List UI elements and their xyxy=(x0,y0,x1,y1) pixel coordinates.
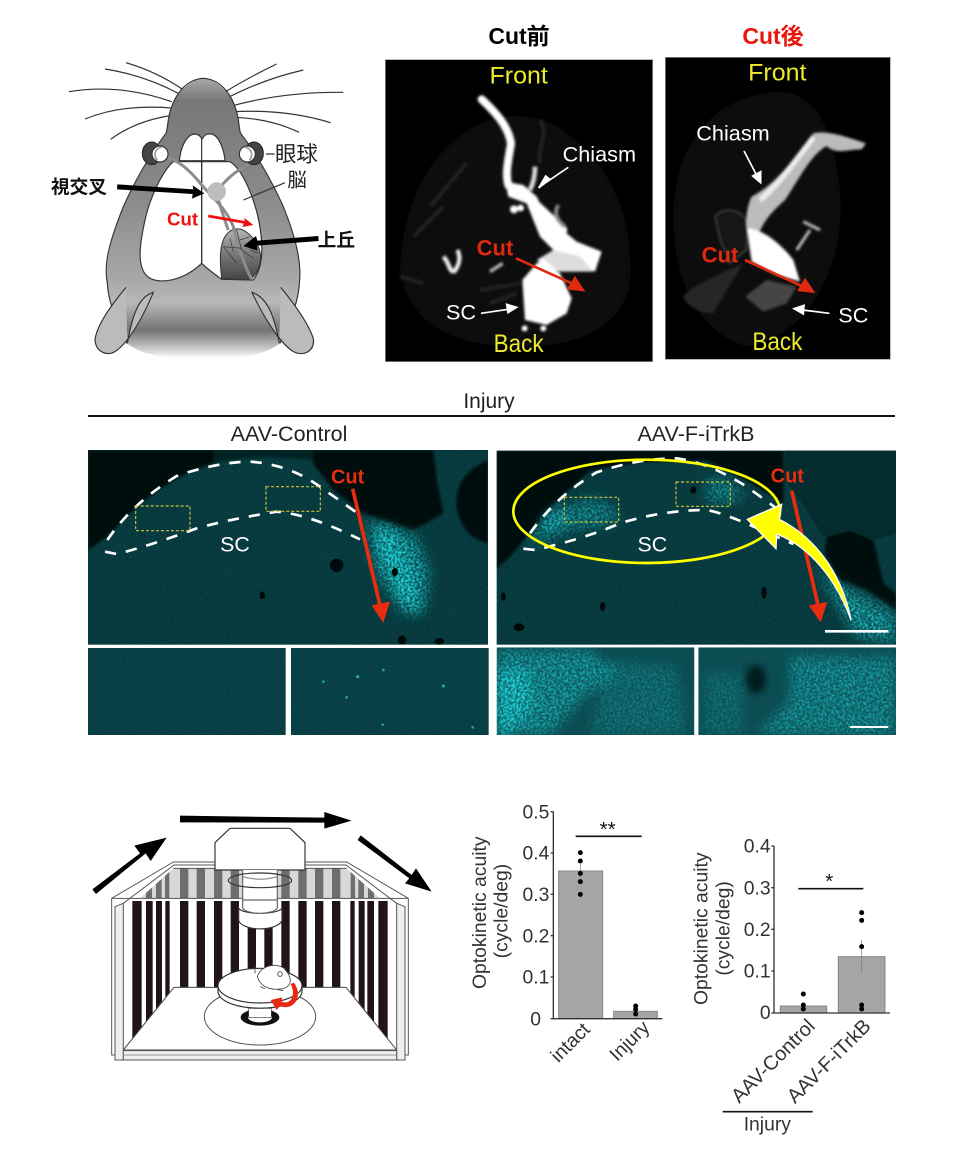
inset right xyxy=(698,647,896,735)
group bar xyxy=(723,1109,813,1114)
divider line xyxy=(88,415,895,417)
label: Cut: Cut xyxy=(477,235,514,260)
arrow: yellow curved xyxy=(747,504,851,620)
data points xyxy=(578,850,638,1016)
y axis tick labels: 0.4 xyxy=(522,844,550,865)
error bar xyxy=(861,940,863,973)
y axis tick labels: 0 xyxy=(530,1009,541,1030)
photo: brain before cut xyxy=(385,60,653,362)
label: optic chiasm: 視交叉 xyxy=(51,176,107,197)
icon: superior colliculus xyxy=(220,229,261,280)
inset right xyxy=(291,648,489,735)
heading: AAV-Control: AAV-Control xyxy=(231,422,347,446)
axes xyxy=(551,812,662,1019)
rotating platform xyxy=(218,968,302,1008)
arrow: SC xyxy=(481,304,517,313)
photo background xyxy=(665,57,890,359)
chart: optokinetic acuity intact vs injury xyxy=(470,802,662,1067)
arrow: Cut xyxy=(353,489,387,619)
micrograph background xyxy=(88,450,488,645)
back wall black stripes xyxy=(123,900,397,1050)
x label: AAV-Control: AAV-Control xyxy=(727,1015,820,1108)
label: Back: Back xyxy=(752,328,803,356)
faint head shape xyxy=(400,116,630,347)
icon: optic chiasm xyxy=(207,182,226,201)
arrow: Cut xyxy=(745,260,813,291)
camera body xyxy=(215,828,305,870)
heading: AAV-F-iTrkB: AAV-F-iTrkB xyxy=(637,422,755,446)
back wall upper stripes xyxy=(140,868,380,898)
arrow: rotation left xyxy=(92,838,167,894)
title: Cut after: Cut後 xyxy=(742,23,804,49)
axes xyxy=(771,846,890,1013)
inset box left xyxy=(136,506,190,531)
panel: AAV-F-iTrkB micrographs xyxy=(497,451,896,735)
label: Chiasm: Chiasm xyxy=(563,141,636,166)
label: Cut: Cut xyxy=(771,465,804,487)
y axis tick labels xyxy=(744,837,771,1024)
y axis tick labels: 0.1 xyxy=(522,968,549,989)
cyan axons xyxy=(367,520,430,615)
dark holes xyxy=(260,559,444,645)
scale bar xyxy=(825,627,888,635)
icon: red rotation arrow xyxy=(271,983,298,1010)
y axis title: (cycle/deg) xyxy=(492,864,513,958)
icon: mouse whiskers xyxy=(69,63,343,139)
significance star: * xyxy=(825,870,833,893)
y axis title xyxy=(691,852,734,1005)
right tissue region xyxy=(785,451,896,540)
x label: AAV-F-iTrkB: AAV-F-iTrkB xyxy=(783,1015,876,1108)
label: Front: Front xyxy=(748,60,807,87)
icon: brain right hemisphere xyxy=(202,162,262,280)
y axis tick labels: 0.4 xyxy=(744,837,771,858)
mouse body outline xyxy=(106,78,300,343)
icon: right eye xyxy=(239,142,263,165)
label: Front: Front xyxy=(489,62,548,89)
dark background regions xyxy=(88,450,488,550)
icon: mouse body xyxy=(107,78,300,358)
icon: olfactory bulbs xyxy=(179,134,225,161)
label: Chiasm: Chiasm xyxy=(696,121,770,146)
y axis tick labels: 0.5 xyxy=(522,802,549,823)
label: SC: SC xyxy=(446,299,476,324)
arrow: cut line xyxy=(208,215,253,227)
y axis tick labels xyxy=(522,802,550,1030)
label: Back: Back xyxy=(494,330,544,358)
significance bar xyxy=(576,834,642,839)
floor circle xyxy=(204,988,316,1045)
x label: Injury: Injury xyxy=(606,1017,654,1066)
label: Cut: Cut xyxy=(331,466,365,488)
label: superior colliculus: 上丘 xyxy=(318,230,355,251)
arrow: SC xyxy=(794,305,829,314)
y axis tick labels: 0.2 xyxy=(744,920,771,941)
faint tissue detail xyxy=(400,120,544,303)
x label: intact: intact xyxy=(547,1019,595,1067)
micrograph background xyxy=(497,451,896,645)
y axis tick labels: 0.3 xyxy=(744,878,771,899)
label: brain: 脳 xyxy=(287,170,307,192)
room frame xyxy=(112,862,408,1060)
photo: brain after cut xyxy=(665,57,890,359)
icon: left eye xyxy=(142,142,168,165)
chart: optokinetic acuity control vs iTrkB xyxy=(691,837,890,1136)
arrow: rotation right xyxy=(358,835,432,892)
error bar xyxy=(579,864,581,877)
significance stars: ** xyxy=(600,818,616,841)
optic nerve branches xyxy=(223,230,258,263)
heading: Injury: Injury xyxy=(463,390,515,413)
mouse brain diagram xyxy=(51,63,355,358)
label: Cut: Cut xyxy=(167,209,198,230)
arrow: rotation top xyxy=(180,812,352,829)
label: Cut: Cut xyxy=(702,243,739,268)
optokinetic apparatus illustration xyxy=(92,812,432,1060)
room floor xyxy=(123,987,397,1050)
icon: ears xyxy=(95,287,313,354)
icon: brain left hemisphere xyxy=(140,162,202,281)
micrograph texture xyxy=(88,450,488,645)
inset scale bar xyxy=(850,724,888,730)
superior colliculus blob xyxy=(522,258,572,325)
group label: Injury: Injury xyxy=(744,1115,791,1136)
faint head shape xyxy=(673,92,841,347)
label: eyeball: 眼球 xyxy=(275,142,318,166)
y axis title: (cycle/deg) xyxy=(713,881,734,976)
bars xyxy=(780,957,885,1013)
label: SC: SC xyxy=(220,533,250,557)
platform stem and base xyxy=(241,1008,279,1026)
inset left xyxy=(497,647,694,735)
y axis tick labels: 0.3 xyxy=(522,885,549,906)
arrow: to optic chiasm xyxy=(117,184,204,199)
faint left tissue xyxy=(683,210,797,313)
inset box right xyxy=(266,487,320,511)
arrow: Chiasm xyxy=(539,167,568,188)
significance bar xyxy=(798,886,863,891)
cyan axons xyxy=(530,478,896,643)
bars xyxy=(559,871,657,1019)
SC dashed outline xyxy=(105,462,360,554)
yellow ellipse highlight xyxy=(513,460,780,563)
label leader: brain xyxy=(243,154,285,200)
title: Cut before: Cut前 xyxy=(488,23,550,49)
inset left xyxy=(88,648,286,735)
dark holes xyxy=(501,486,767,631)
y axis title: Optokinetic acuity xyxy=(691,852,712,1005)
optic nerve xyxy=(165,157,252,279)
optic tract xyxy=(443,99,602,331)
panel: AAV-Control micrographs xyxy=(88,450,489,735)
optic tract xyxy=(746,132,866,282)
y axis tick labels: 0 xyxy=(760,1003,771,1024)
y axis title xyxy=(470,836,513,989)
dark background regions xyxy=(497,451,896,610)
y axis tick labels: 0.2 xyxy=(522,926,549,947)
label: SC: SC xyxy=(838,303,868,328)
camera lens column xyxy=(228,870,292,929)
icon: mouse on platform xyxy=(255,965,290,991)
data points xyxy=(801,910,864,1011)
y axis title: Optokinetic acuity xyxy=(470,836,491,989)
micrograph texture xyxy=(497,451,896,645)
arrow: Cut xyxy=(516,258,583,290)
inset box left xyxy=(564,497,619,522)
label: SC: SC xyxy=(638,533,667,557)
photo background xyxy=(385,60,653,362)
y axis tick labels: 0.1 xyxy=(744,962,771,983)
arrow: Chiasm xyxy=(744,151,761,183)
arrow: to superior colliculus xyxy=(243,236,319,251)
arrow: Cut xyxy=(792,491,825,618)
inset box right xyxy=(676,482,730,506)
SC dashed outline xyxy=(523,458,793,550)
